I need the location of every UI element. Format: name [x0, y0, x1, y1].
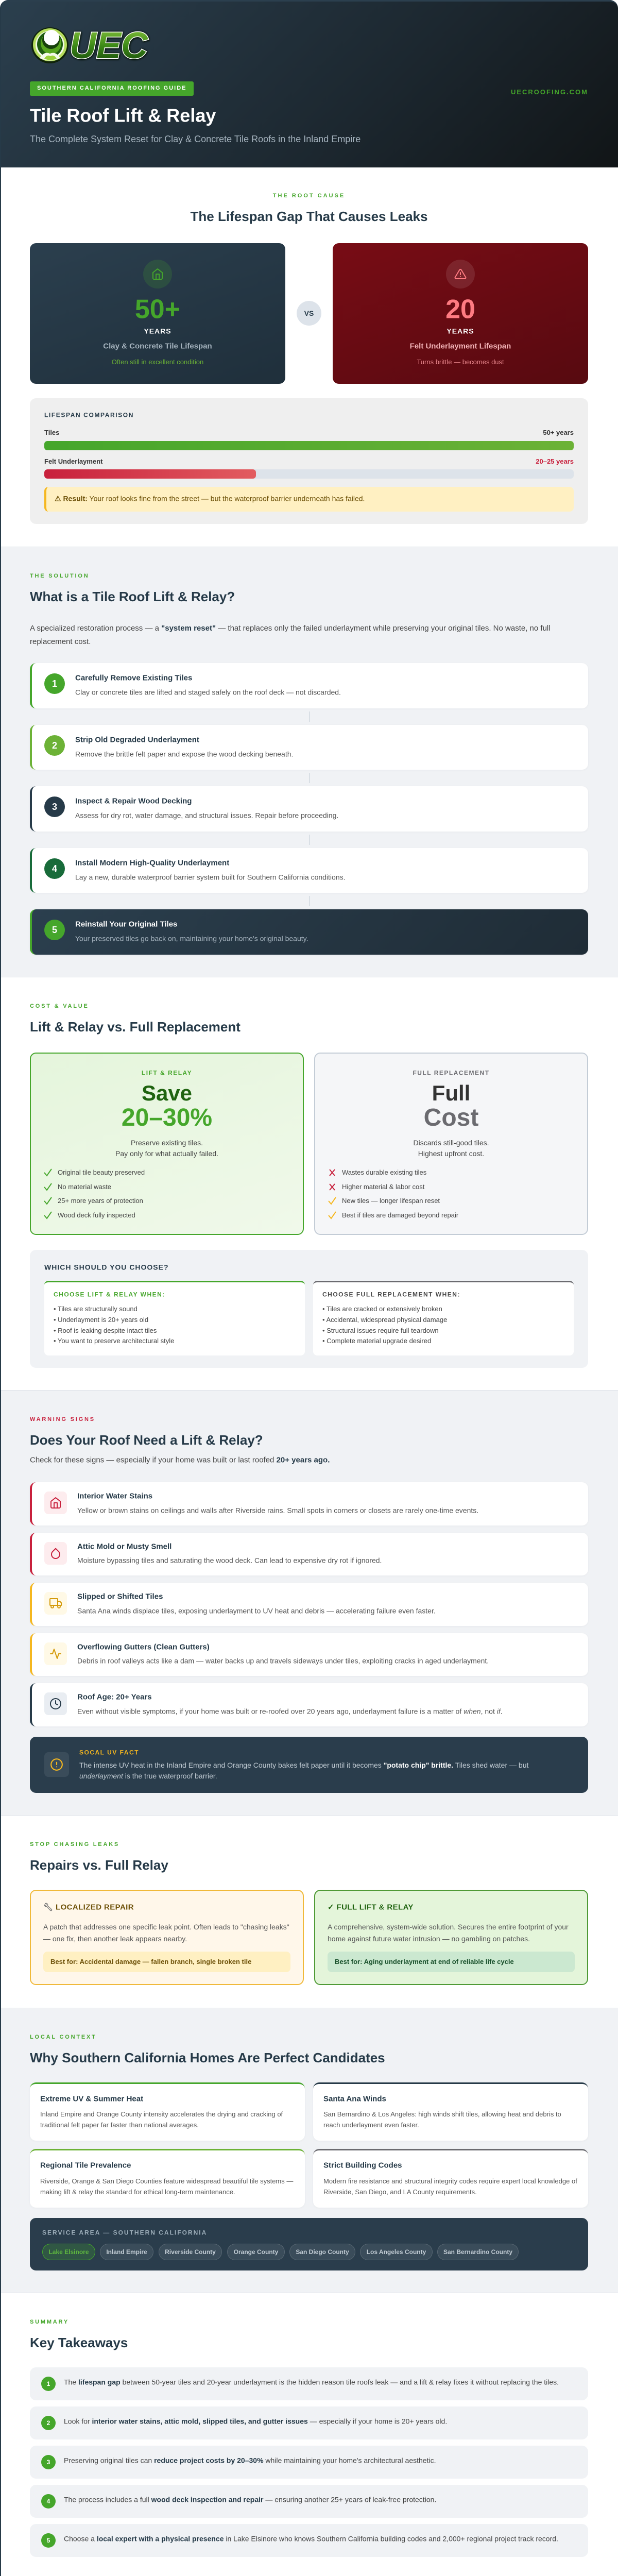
takeaway 4 — [30, 2485, 588, 2518]
step description: Clay or concrete tiles are lifted and staged safely on the roof deck — not discarded. — [75, 688, 341, 696]
list items — [322, 1305, 447, 1345]
number — [41, 2494, 56, 2509]
logo — [31, 27, 150, 64]
panel text: A patch that addresses one specific leak point. Often leads to "chasing leaks" — [43, 1923, 289, 1931]
step number: 1 — [52, 679, 57, 689]
plan description: Highest upfront cost. — [418, 1149, 484, 1158]
step 3 — [30, 786, 588, 832]
step 2 — [30, 725, 588, 770]
step description: Your preserved tiles go back on, maintaining your home's original beauty. — [75, 934, 308, 942]
item 4 — [44, 1211, 52, 1219]
step description: Remove the brittle felt paper and expose the wood decking beneath. — [75, 750, 293, 758]
step title: Reinstall Your Original Tiles — [75, 920, 177, 929]
takeaway 3 — [30, 2446, 588, 2479]
card text — [323, 2110, 561, 2129]
card text: Inland Empire and Orange County intensity accelerates the drying and cracking of — [40, 2110, 283, 2118]
panel title: 🔧︎ LOCALIZED REPAIR — [43, 1903, 134, 1912]
section label: LOCAL CONTEXT — [30, 2034, 97, 2040]
benefits list: Wood deck fully inspected — [58, 1211, 135, 1219]
number — [41, 2377, 56, 2391]
step number: 2 — [52, 740, 57, 751]
panel: felt lifespan — [333, 243, 588, 384]
card title: Felt Underlayment Lifespan — [410, 342, 511, 351]
panel heading: WHICH SHOULD YOU CHOOSE? — [44, 1263, 169, 1271]
section: local context — [0, 2008, 618, 2293]
vs badge — [297, 301, 321, 326]
sign description: Even without visible symptoms, if your home was built or re-roofed over 20 years ago, underlayment failure is a matter of when, not if. — [77, 1707, 503, 1715]
sign description: Debris in roof valleys acts like a dam — water backs up and travels sideways under tiles, exploiting cracks in aged underlayment. — [77, 1656, 489, 1665]
pill: orange county: Orange County — [234, 2248, 278, 2256]
section: key takeaways — [0, 2293, 618, 2576]
section: warning signs — [0, 1390, 618, 1815]
saving amount: 20–30% — [122, 1104, 212, 1131]
step description: Assess for dry rot, water damage, and structural issues. Repair before proceeding. — [75, 811, 338, 819]
card text: Riverside, Orange & San Diego Counties feature widespread beautiful tile systems — — [40, 2177, 293, 2185]
icon: house — [143, 260, 172, 289]
card text: San Bernardino & Los Angeles: high winds shift tiles, allowing heat and debris to — [323, 2110, 561, 2118]
step 1 — [30, 663, 588, 708]
pill: los angeles county: Los Angeles County — [367, 2248, 426, 2256]
section heading: Lift & Relay vs. Full Replacement — [30, 1019, 241, 1035]
card text — [323, 2177, 577, 2196]
step title: Inspect & Repair Wood Decking — [75, 797, 192, 806]
step title: Carefully Remove Existing Tiles — [75, 674, 192, 683]
card: extreme uv — [30, 2082, 305, 2141]
icon: house — [44, 1492, 67, 1514]
number: 5 — [47, 2537, 50, 2544]
card text: making lift & relay the standard for ethical long-term maintenance. — [40, 2188, 235, 2196]
benefits list: 25+ more years of protection — [58, 1197, 143, 1205]
chart title: LIFESPAN COMPARISON — [44, 411, 134, 418]
fact text — [79, 1761, 528, 1780]
plan description: Preserve existing tiles. — [131, 1139, 203, 1147]
list items: • Roof is leaking despite intact tiles — [54, 1327, 157, 1334]
sign description: Yellow or brown stains on ceilings and walls after Riverside rains. Small spots in corners or closets are rarely one-time events. — [77, 1506, 478, 1514]
best for note — [43, 1952, 290, 1972]
item 2 — [44, 1183, 52, 1191]
section label: COST & VALUE — [30, 1003, 89, 1009]
list items: • Complete material upgrade desired — [322, 1337, 431, 1345]
step number — [44, 920, 65, 940]
icon: clock — [44, 1692, 67, 1715]
bar label: tiles: Tiles — [44, 429, 59, 436]
card: regional tile prevalence — [30, 2149, 305, 2208]
intro text: Check for these signs — especially if your home was built or last roofed 20+ years ago. — [30, 1456, 330, 1465]
icon: activity — [44, 1642, 67, 1665]
sign: slipped tiles — [30, 1583, 588, 1626]
sign description: Moisture bypassing tiles and saturating the wood deck. Can lead to expensive dry rot if ignored. — [77, 1556, 382, 1564]
panel text: A comprehensive, system-wide solution. Secures the entire footprint of your — [328, 1923, 569, 1931]
panel text — [328, 1923, 569, 1943]
card note: Turns brittle — becomes dust — [417, 358, 504, 366]
list heading: CHOOSE LIFT & RELAY WHEN: — [54, 1291, 165, 1298]
step title: Strip Old Degraded Underlayment — [75, 736, 199, 744]
number: 3 — [47, 2459, 50, 2466]
section label: STOP CHASING LEAKS — [30, 1841, 119, 1848]
step title: Install Modern High-Quality Underlayment — [75, 859, 229, 868]
plan description — [115, 1139, 218, 1158]
panel text: — one fix, then another leak appears nearby. — [43, 1935, 187, 1943]
fact text: underlayment is the true waterproof barrier. — [79, 1772, 217, 1780]
plan description — [413, 1139, 489, 1158]
note text: Best for: Aging underlayment at end of reliable life cycle — [335, 1958, 514, 1965]
connector — [309, 773, 310, 783]
sign description: Santa Ana winds displace tiles, exposing underlayment to UV heat and debris — accelerating failure even faster. — [77, 1606, 436, 1615]
sign title: Slipped or Shifted Tiles — [77, 1592, 163, 1601]
plan label: LIFT & RELAY — [142, 1070, 192, 1077]
website url: UECROOFING.COM — [511, 88, 588, 96]
card text: Riverside, San Diego, and LA County requirements. — [323, 2188, 477, 2196]
number — [41, 2533, 56, 2548]
section heading: Does Your Roof Need a Lift & Relay? — [30, 1432, 263, 1448]
card title: Strict Building Codes — [323, 2161, 402, 2170]
intro paragraph: A specialized restoration process — a "system reset" — that replaces only the failed underlayment while preserving your original tiles. No waste, no full — [30, 624, 551, 633]
text: Preserving original tiles can reduce project costs by 20–30% while maintaining your home's architectural aesthetic. — [64, 2456, 436, 2464]
pill: san diego county — [289, 2244, 355, 2260]
number: 4 — [47, 2498, 50, 2505]
takeaway 1 — [30, 2367, 588, 2400]
intro paragraph — [30, 624, 551, 646]
card: strict building codes — [313, 2149, 588, 2208]
pill: riverside county: Riverside County — [165, 2248, 216, 2256]
bar: tiles — [44, 441, 574, 450]
section heading: The Lifespan Gap That Causes Leaks — [191, 209, 427, 224]
pill: orange county — [227, 2244, 285, 2260]
panel: tile lifespan — [30, 243, 285, 384]
step number: 5 — [52, 925, 57, 935]
icon: warning triangle — [446, 260, 475, 289]
pill: lake elsinore — [42, 2244, 95, 2260]
item 1 — [329, 1169, 335, 1176]
panel: lifespan comparison chart — [30, 398, 588, 524]
section: stop chasing leaks — [0, 1815, 618, 2008]
callout: socal uv fact — [30, 1737, 588, 1793]
section heading: Why Southern California Homes Are Perfect Candidates — [30, 2050, 385, 2065]
card text: traditional felt paper far faster than national averages. — [40, 2121, 199, 2129]
step description: Lay a new, durable waterproof barrier system built for Southern California conditions. — [75, 873, 345, 881]
drawbacks list — [328, 1168, 458, 1219]
card title: Extreme UV & Summer Heat — [40, 2095, 143, 2104]
text: Look for interior water stains, attic mold, slipped tiles, and gutter issues — especially if your home is 20+ years old. — [64, 2417, 447, 2425]
pill: san bernardino county — [437, 2244, 519, 2260]
item 3 — [328, 1197, 336, 1205]
callout text: ⚠ Result: Your roof looks fine from the street — but the waterproof barrier underneath has failed. — [55, 494, 365, 502]
panel heading: SERVICE AREA — SOUTHERN CALIFORNIA — [42, 2229, 207, 2236]
panel: localized repair — [30, 1890, 304, 1985]
plan label: FULL REPLACEMENT — [413, 1070, 490, 1077]
callout: result — [44, 487, 574, 512]
icon: truck — [44, 1592, 67, 1615]
card text: reach underlayment even faster. — [323, 2121, 419, 2129]
cost amount: Cost — [424, 1104, 478, 1131]
step number — [44, 796, 65, 817]
list items: • Tiles are structurally sound — [54, 1305, 138, 1313]
stat: 50+: 50+ — [135, 295, 180, 325]
icon: alert circle — [44, 1752, 69, 1777]
benefits list: No material waste — [58, 1182, 111, 1190]
card text: Modern fire resistance and structural integrity codes require expert local knowledge of — [323, 2177, 577, 2185]
sign title: Roof Age: 20+ Years — [77, 1693, 152, 1702]
panel text — [43, 1923, 289, 1943]
step 4 — [30, 848, 588, 893]
fact text: The intense UV heat in the Inland Empire and Orange County bakes felt paper until it becomes "potato chip" brittle. Tiles shed water — but — [79, 1761, 528, 1769]
drawbacks list: Higher material & labor cost — [342, 1182, 424, 1190]
card title: Regional Tile Prevalence — [40, 2161, 131, 2170]
card text — [40, 2177, 294, 2196]
number — [41, 2416, 56, 2430]
number — [41, 2455, 56, 2469]
takeaway 2 — [30, 2406, 588, 2439]
drawbacks list: New tiles — longer lifespan reset — [342, 1197, 440, 1205]
sign title: Overflowing Gutters (Clean Gutters) — [77, 1643, 210, 1652]
item 2 — [329, 1183, 335, 1191]
list items — [54, 1305, 174, 1345]
text: Choose a local expert with a physical presence in Lake Elsinore who knows Southern California building codes and 2,000+ regional project track record. — [64, 2534, 558, 2543]
pill: san bernardino county: San Bernardino County — [443, 2248, 512, 2256]
section label: THE ROOT CAUSE — [273, 193, 345, 199]
card note: Often still in excellent condition — [112, 358, 203, 366]
bar label: felt: Felt Underlayment — [44, 457, 102, 465]
card title: Santa Ana Winds — [323, 2095, 386, 2104]
choose full replacement — [313, 1281, 574, 1355]
list items: • You want to preserve architectural style — [54, 1337, 174, 1345]
panel: which should you choose — [30, 1250, 588, 1368]
step number — [44, 673, 65, 694]
sign title: Interior Water Stains — [77, 1492, 152, 1501]
plan description: Discards still-good tiles. — [413, 1139, 489, 1147]
panel: full replacement — [314, 1053, 588, 1235]
item 4 — [328, 1211, 336, 1219]
guide badge: SOUTHERN CALIFORNIA ROOFING GUIDE — [37, 85, 186, 91]
note text: Best for: Accidental damage — fallen branch, single broken tile — [50, 1958, 251, 1965]
pill: san diego county: San Diego County — [296, 2248, 349, 2256]
guide badge — [30, 81, 194, 96]
list items: • Tiles are cracked or extensively broken — [322, 1305, 442, 1313]
list items: • Accidental, widespread physical damage — [322, 1316, 447, 1324]
plan description: Pay only for what actually failed. — [115, 1149, 218, 1158]
pill: lake elsinore: Lake Elsinore — [48, 2248, 89, 2256]
section: cost and value — [0, 977, 618, 1390]
fact label: SOCAL UV FACT — [79, 1749, 139, 1756]
panel: lift and relay — [30, 1053, 304, 1235]
main title: Tile Roof Lift & Relay — [30, 105, 216, 126]
card text — [40, 2110, 283, 2129]
text: The process includes a full wood deck inspection and repair — ensuring another 25+ years of leak-free protection. — [64, 2495, 436, 2503]
sign: roof age — [30, 1683, 588, 1726]
drawbacks list: Wastes durable existing tiles — [342, 1168, 426, 1176]
benefits list — [44, 1168, 145, 1219]
sign: overflowing gutters — [30, 1633, 588, 1676]
list items: • Structural issues require full teardown — [322, 1327, 439, 1334]
panel text: home against future water intrusion — no gambling on patches. — [328, 1935, 530, 1943]
section heading: Key Takeaways — [30, 2335, 128, 2350]
choose lift and relay — [44, 1281, 305, 1355]
pill: inland empire: Inland Empire — [106, 2248, 147, 2256]
section heading: What is a Tile Roof Lift & Relay? — [30, 589, 235, 604]
section: the solution — [0, 547, 618, 977]
intro paragraph: replacement cost. — [30, 637, 91, 646]
panel: service area — [30, 2218, 588, 2270]
stat: 20: 20 — [445, 295, 475, 325]
card title: Clay & Concrete Tile Lifespan — [103, 342, 212, 351]
stat unit: YEARS — [447, 327, 474, 335]
list heading: CHOOSE FULL REPLACEMENT WHEN: — [322, 1291, 460, 1298]
pill: los angeles county — [360, 2244, 433, 2260]
panel title: ✓ FULL LIFT & RELAY — [328, 1903, 414, 1912]
icon: droplet — [44, 1542, 67, 1565]
section label: SUMMARY — [30, 2319, 69, 2325]
list items: • Underlayment is 20+ years old — [54, 1316, 148, 1324]
panel: full lift and relay — [314, 1890, 588, 1985]
step number: 3 — [52, 802, 57, 812]
item 1 — [44, 1168, 52, 1177]
item 3 — [44, 1197, 52, 1205]
connector — [309, 835, 310, 845]
sign: attic mold — [30, 1533, 588, 1575]
step number: 4 — [52, 863, 57, 874]
section: the root cause — [0, 167, 618, 547]
saving headline: Save — [142, 1081, 192, 1105]
pill: riverside county — [159, 2244, 222, 2260]
pill: inland empire — [100, 2244, 153, 2260]
section label: THE SOLUTION — [30, 573, 90, 579]
section heading: Repairs vs. Full Relay — [30, 1857, 168, 1873]
sign title: Attic Mold or Musty Smell — [77, 1543, 171, 1551]
bar: felt — [44, 469, 574, 479]
step 5 — [30, 909, 588, 955]
step number — [44, 735, 65, 756]
stat unit: YEARS — [144, 327, 171, 335]
connector — [309, 896, 310, 906]
card: santa ana winds — [313, 2082, 588, 2141]
text: The lifespan gap between 50-year tiles and 20-year underlayment is the hidden reason tile roofs leak — and a lift & relay fixes it without replacing the tiles. — [64, 2378, 559, 2386]
number: 2 — [47, 2419, 50, 2427]
vs badge: VS — [304, 309, 314, 317]
best for note — [328, 1952, 575, 1972]
section label: WARNING SIGNS — [30, 1416, 95, 1422]
bar value: felt: 20–25 years — [536, 457, 574, 465]
bar value: tiles: 50+ years — [543, 429, 574, 436]
header — [0, 0, 618, 167]
sign: water stains — [30, 1482, 588, 1526]
step number — [44, 858, 65, 879]
drawbacks list: Best if tiles are damaged beyond repair — [342, 1211, 458, 1219]
connector — [309, 711, 310, 722]
benefits list: Original tile beauty preserved — [58, 1168, 145, 1176]
takeaway 5 — [30, 2524, 588, 2557]
subtitle: The Complete System Reset for Clay & Concrete Tile Roofs in the Inland Empire — [30, 134, 360, 144]
number: 1 — [47, 2380, 50, 2387]
cost headline: Full — [432, 1081, 470, 1105]
